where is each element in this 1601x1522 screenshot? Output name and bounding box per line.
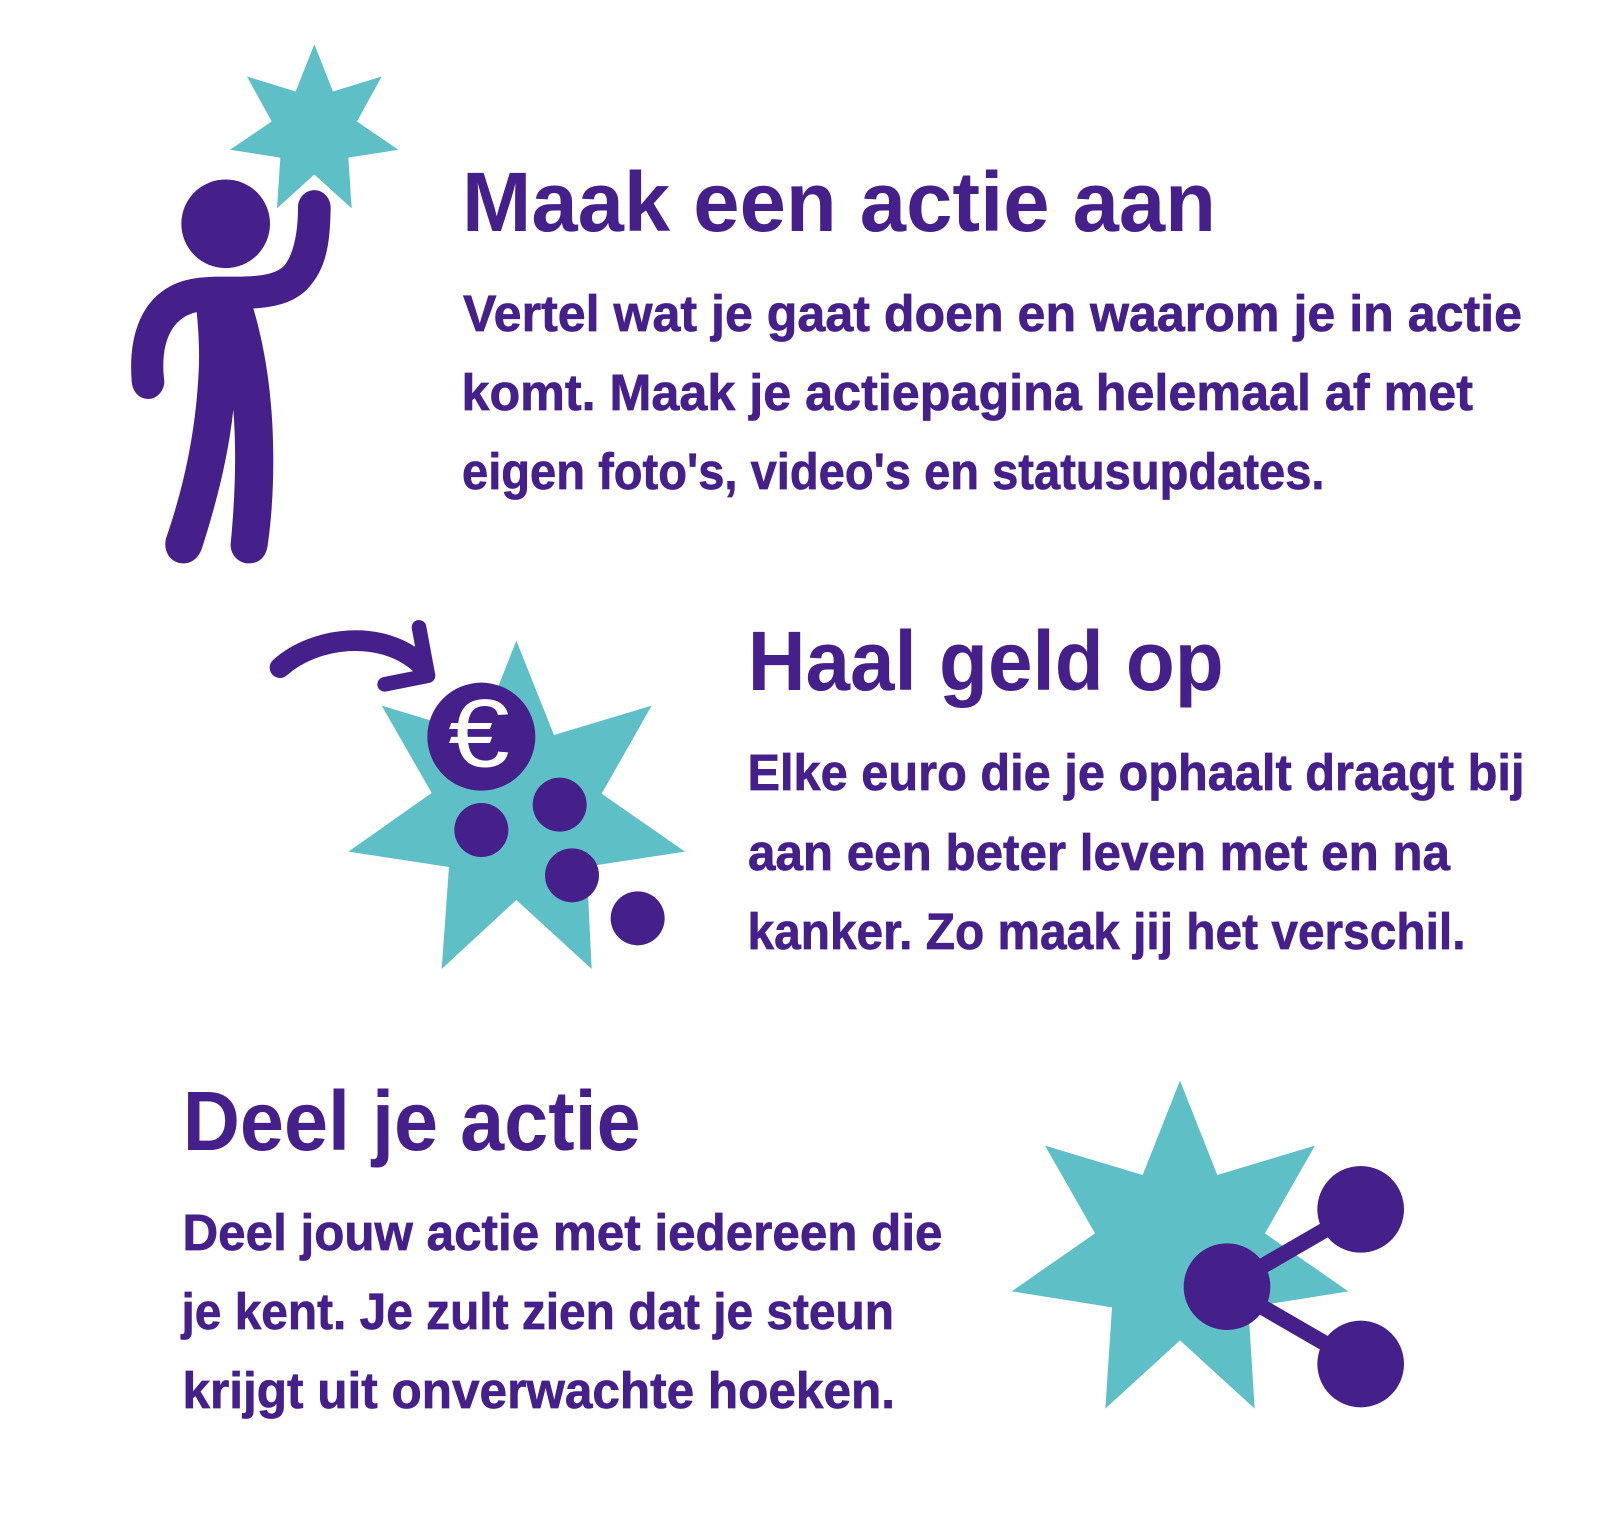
text block: elke euro [748,744,1524,960]
text block: vertel wat je gaat doen [462,285,1522,500]
icon: teal star [348,641,685,969]
icon: coins [454,778,665,945]
heading: haal geld op: Haal geld op [748,614,1224,708]
text block: elke euro: kanker. Zo maak jij het verschil. [748,903,1466,960]
panel: deel je actie [181,1074,1404,1419]
text block: vertel wat je gaat doen: eigen foto's, video's en statusupdates. [462,443,1324,500]
text block: elke euro: aan een beter leven met en na [748,824,1451,881]
text block: deel jouw actie: Deel jouw actie met iedereen die [182,1204,942,1261]
icon: euro coin [427,679,535,791]
icon: person head [181,179,270,268]
icon: person body [131,190,331,563]
heading: deel je actie: Deel je actie [183,1074,641,1168]
icon: share symbol [1184,1166,1404,1407]
icon: person reaching for star [131,44,398,563]
icon: teal star [1012,1081,1348,1409]
text block: deel jouw actie: krijgt uit onverwachte hoeken. [182,1362,895,1419]
text block: elke euro: Elke euro die je ophaalt draagt bij [748,744,1524,801]
icon: teal star [230,44,398,208]
heading: maak een actie aan: Maak een actie aan [462,155,1216,249]
text block: deel jouw actie: je kent. Je zult zien dat je steun [181,1283,894,1340]
icon: star with share symbol [1012,1081,1404,1409]
euro sign: € [448,679,510,787]
panel: maak een actie aan [131,44,1522,563]
panel: haal geld op [280,614,1524,969]
icon: star with coins and arrow [280,627,685,969]
arrow: curved into star [280,627,428,684]
text block: vertel wat je gaat doen: komt. Maak je actiepagina helemaal af met [462,364,1473,421]
text block: deel jouw actie [181,1204,943,1419]
text block: vertel wat je gaat doen: Vertel wat je gaat doen en waarom je in actie [463,285,1522,342]
